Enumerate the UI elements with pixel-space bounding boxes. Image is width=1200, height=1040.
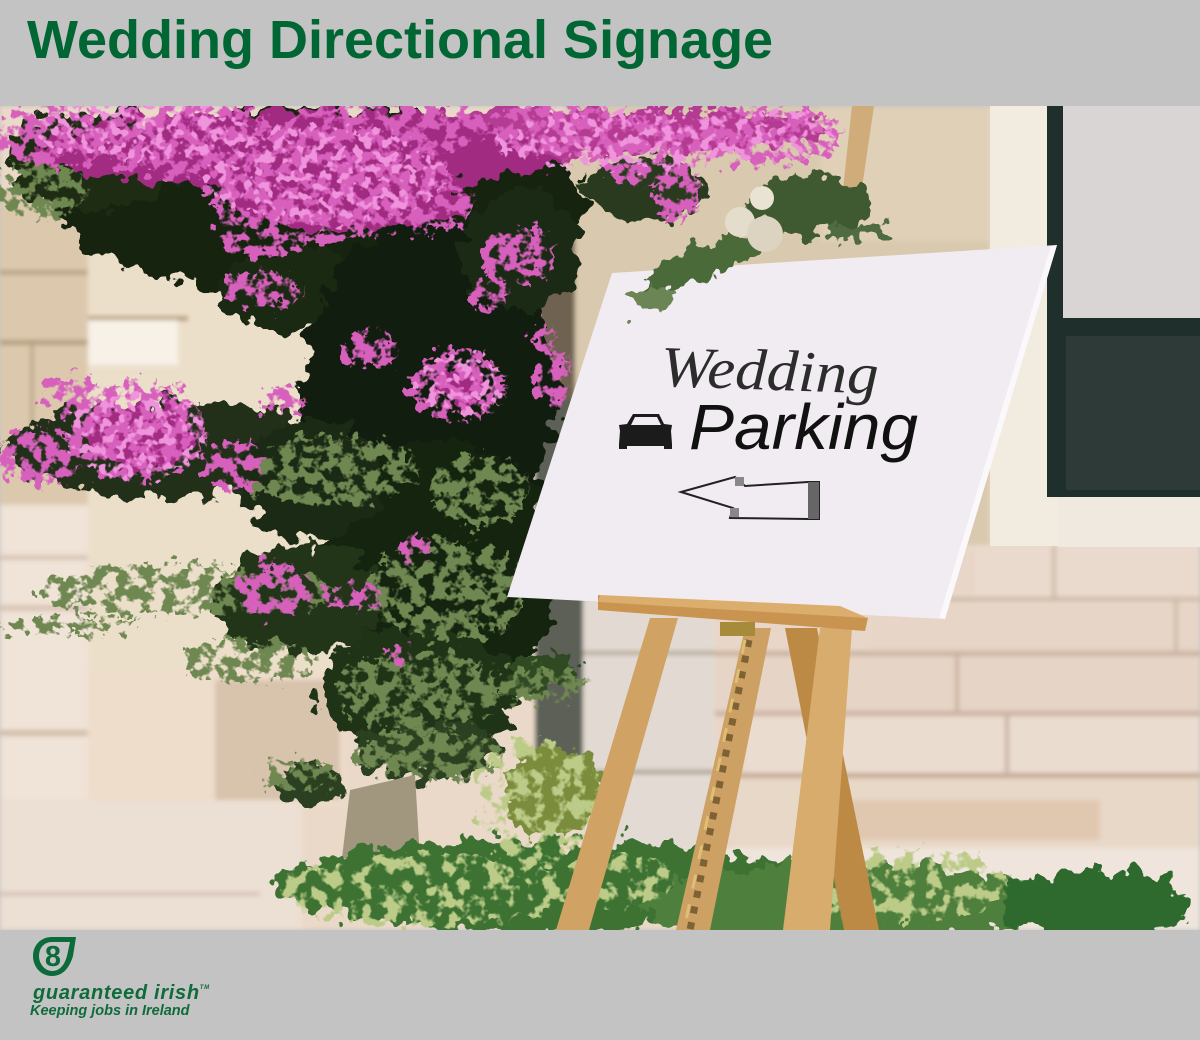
easel shelf [598,595,868,636]
easel mast [838,106,874,235]
flowers: magenta bougainvillea clusters [0,100,845,662]
sign board [507,245,1057,619]
foliage: climbing plant [0,105,705,805]
sign text: Wedding: Wedding [660,334,880,407]
tagline: Keeping jobs in Ireland [30,1003,190,1019]
brass hinge [720,622,755,636]
wooden easel [556,106,879,930]
pale green leaves [280,735,1010,926]
brand name: guaranteed irishTM [33,982,210,1004]
icon: green shield leaf [33,937,76,976]
deep pink petals [40,108,835,467]
icon: car [619,414,672,449]
leaves [628,175,894,312]
icon: green shield leaf: 8 [45,941,61,973]
photo: wedding sign on easel beside flowering wall [0,106,1200,930]
title: Wedding Directional Signage [27,10,773,70]
highlight petals [40,100,840,480]
ground plants [270,735,1190,947]
arrow pointing left [681,477,819,519]
centre ladder [676,628,771,930]
bright pink petals [0,101,845,662]
front leg [783,628,852,930]
sign text: Parking: Parking [689,391,918,463]
green plant base [270,745,1190,947]
door and white frame [990,106,1200,547]
left leg [556,618,678,930]
logo: guaranteed irish [30,937,210,1019]
sunlit leaves [0,162,590,793]
roses [725,186,783,252]
rear leg [785,628,879,930]
background: stone wall and steps [0,106,1200,930]
floral spray on top of sign [628,175,894,312]
dark leaf mass [5,105,705,805]
trunk [342,775,420,858]
